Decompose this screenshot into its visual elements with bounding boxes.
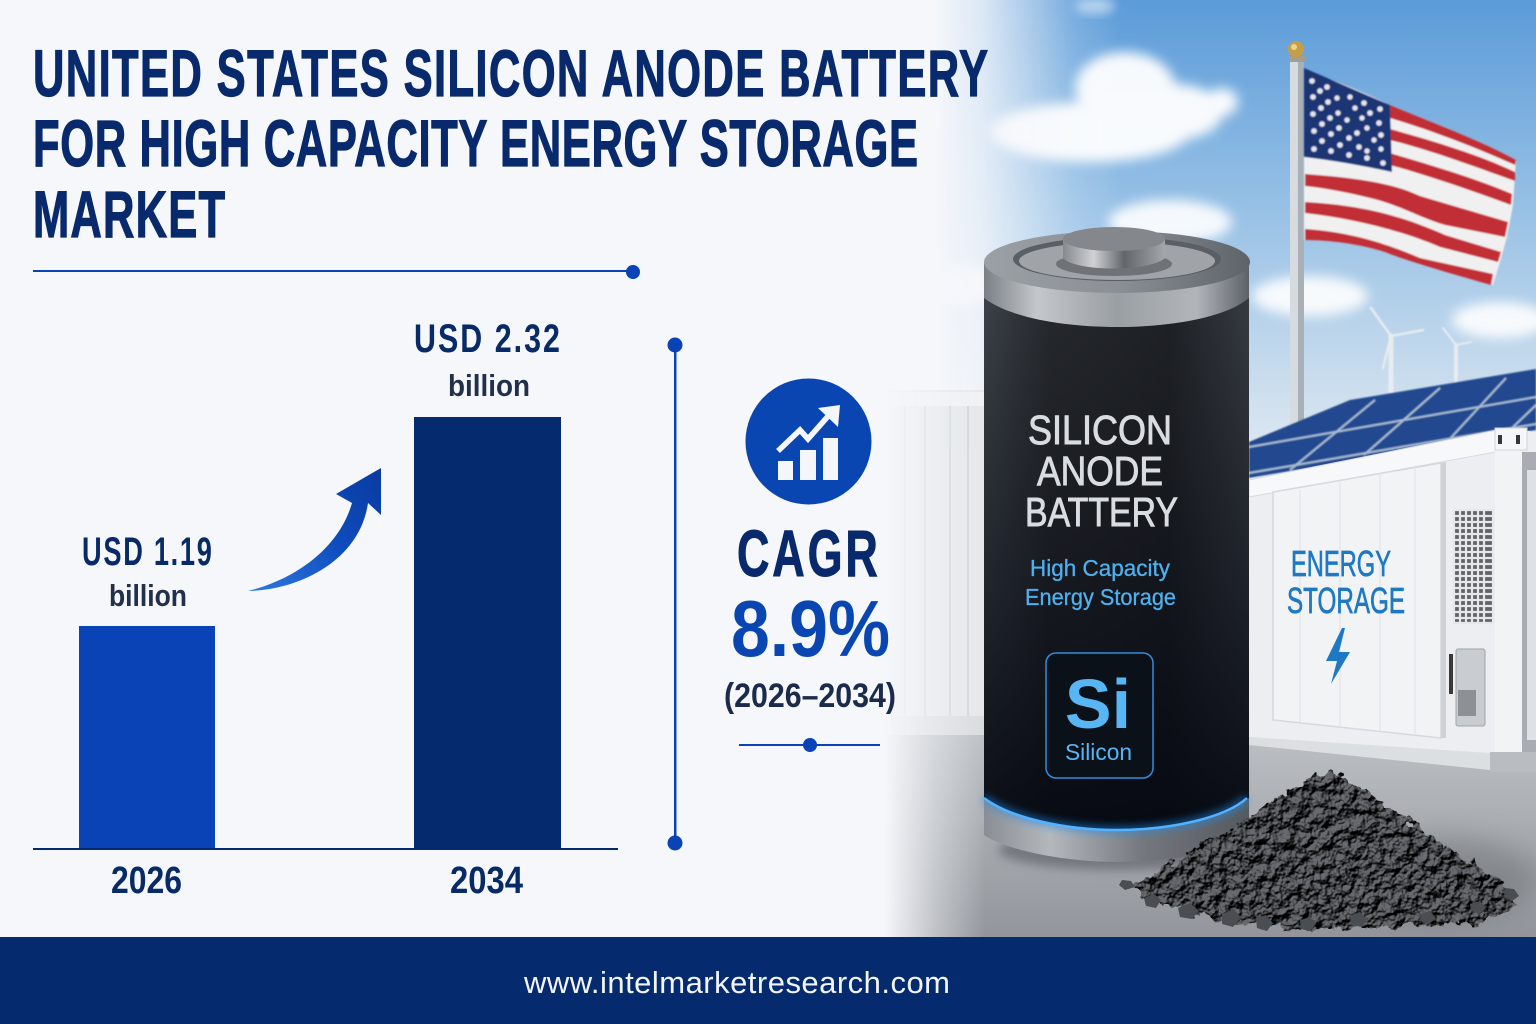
value: 2034 <box>414 316 560 403</box>
value: 2034: billion <box>448 368 530 403</box>
title <box>33 36 988 251</box>
battery sublabel: High Capacity <box>1030 555 1170 581</box>
cagr heading: CAGR <box>737 516 878 590</box>
flag stars <box>1309 78 1386 166</box>
ground floor <box>880 390 1536 937</box>
cagr period: (2026–2034) <box>724 677 896 715</box>
storage container: right <box>1249 428 1536 772</box>
value: 2026: billion <box>109 578 187 613</box>
battery cap <box>984 262 1249 327</box>
cagr block <box>724 378 896 752</box>
photo: sky with clouds <box>900 0 1536 450</box>
container label: ENERGY <box>1291 543 1391 584</box>
cagr divider <box>739 738 880 752</box>
title: UNITED STATES SILICON ANODE BATTERY <box>33 36 988 110</box>
battery label: ANODE <box>1037 448 1163 494</box>
ground shadow <box>998 830 1242 870</box>
cagr value: 8.9% <box>731 584 890 673</box>
title divider <box>33 265 640 279</box>
value: 2026: USD 1.19 <box>82 530 212 574</box>
cloud: top right wisp <box>1075 0 1115 14</box>
battery base <box>984 790 1249 862</box>
year labels <box>111 860 523 902</box>
icon: growth chart <box>746 378 872 504</box>
icon: lightning bolt <box>1326 628 1350 684</box>
battery sublabel <box>1025 555 1176 610</box>
battery label <box>1025 407 1178 535</box>
title: FOR HIGH CAPACITY ENERGY STORAGE <box>33 106 918 180</box>
cloud: upper <box>990 52 1238 162</box>
title: MARKET <box>33 177 225 251</box>
value: 2034: USD 2.32 <box>414 316 560 361</box>
control box <box>1449 649 1485 726</box>
chart axis <box>33 848 618 850</box>
solar panels <box>1249 369 1536 478</box>
container label: STORAGE <box>1287 580 1405 621</box>
battery label: BATTERY <box>1025 489 1178 535</box>
cloud: middle <box>920 200 1536 338</box>
container label <box>1287 543 1405 621</box>
battery terminal <box>1063 239 1165 268</box>
icon: american flag <box>1304 68 1516 285</box>
growth arrow <box>248 468 381 591</box>
silicon rubble pile <box>1119 768 1536 931</box>
glow ring <box>984 798 1247 830</box>
footer band <box>0 937 1536 1024</box>
loose rocks <box>1119 880 1519 931</box>
flag pole <box>1288 41 1305 428</box>
year labels: 2026 <box>111 860 182 902</box>
silicon element tile: Si <box>1065 665 1131 743</box>
battery body <box>984 295 1249 830</box>
bar: 2034 <box>414 417 561 849</box>
battery sublabel: Energy Storage <box>1025 584 1176 610</box>
storage container: left <box>880 390 986 735</box>
year labels: 2034 <box>450 860 523 902</box>
bar chart <box>33 316 618 902</box>
bar: 2026 <box>79 626 215 849</box>
vent grille <box>1453 510 1494 623</box>
icon: wind turbines <box>1371 308 1471 392</box>
value: 2026 <box>82 530 212 613</box>
silicon element tile <box>1046 653 1153 778</box>
vertical divider <box>668 338 682 850</box>
footer url: www.intelmarketresearch.com <box>523 965 950 1000</box>
battery <box>984 227 1250 870</box>
silicon element tile: Silicon <box>1065 739 1132 765</box>
battery label: SILICON <box>1028 407 1172 453</box>
container corner casting <box>1490 428 1536 772</box>
